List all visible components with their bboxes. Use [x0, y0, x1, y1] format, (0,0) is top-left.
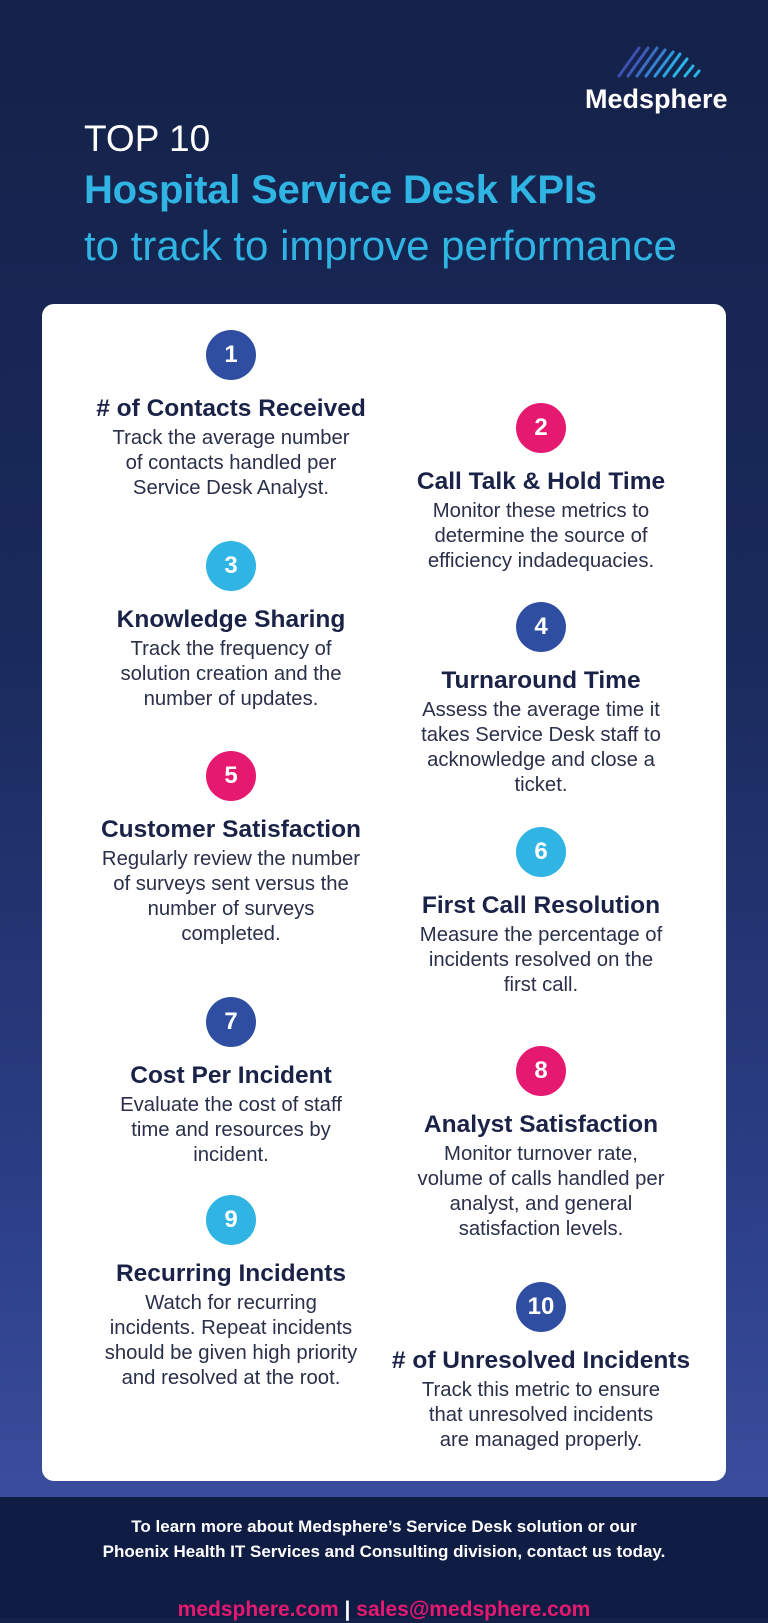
kpi 8 [418, 1046, 664, 1240]
kpi 10: that unresolved incidents [429, 1404, 653, 1426]
kpi 10: 10 [528, 1293, 554, 1320]
kpi 7: time and resources by [131, 1119, 331, 1141]
kpi 8: 8 [534, 1057, 548, 1084]
kpi 2: Call Talk & Hold Time [417, 468, 665, 495]
kpi 6: Measure the percentage of [420, 924, 662, 946]
kpi 7: Cost Per Incident [130, 1062, 332, 1089]
kpi 3: solution creation and the [120, 663, 342, 685]
kpi 9: Recurring Incidents [116, 1260, 346, 1287]
kpi 9 [105, 1195, 358, 1389]
kpi 9: should be given high priority [105, 1342, 357, 1364]
kpi 5: 5 [224, 762, 238, 789]
title: TOP 10 [84, 118, 210, 159]
kpi 4: Turnaround Time [441, 667, 641, 694]
kpi 4 [421, 602, 661, 796]
kpi 1: # of Contacts Received [96, 395, 366, 422]
kpi 9: incidents. Repeat incidents [110, 1317, 352, 1339]
kpi 4: takes Service Desk staff to [421, 724, 661, 746]
kpi 3: Knowledge Sharing [117, 606, 345, 633]
footer: medsphere.com | sales@medsphere.com [178, 1598, 590, 1621]
kpi 10: are managed properly. [440, 1429, 642, 1451]
kpi 4: acknowledge and close a [427, 749, 655, 771]
kpi 6 [420, 827, 662, 996]
kpi 3 [117, 541, 345, 710]
logo: Medsphere [585, 84, 728, 114]
kpi 3: Track the frequency of [130, 638, 332, 660]
kpi 4: 4 [534, 613, 548, 640]
kpi 10: Track this metric to ensure [422, 1379, 660, 1401]
title [84, 118, 677, 269]
kpi 4: Assess the average time it [422, 699, 660, 721]
title: to track to improve performance [84, 222, 677, 269]
kpi 10: # of Unresolved Incidents [392, 1347, 690, 1374]
kpi 8: volume of calls handled per [418, 1168, 664, 1190]
kpi 9: and resolved at the root. [122, 1367, 340, 1389]
kpi 7: 7 [224, 1008, 238, 1035]
kpi 5: Regularly review the number [102, 848, 360, 870]
kpi 5: number of surveys [148, 898, 314, 920]
kpi 2: efficiency indadequacies. [428, 550, 654, 572]
kpi 8: analyst, and general [450, 1193, 632, 1215]
kpi 4: ticket. [514, 774, 567, 796]
kpi 9: 9 [224, 1206, 238, 1233]
title: Hospital Service Desk KPIs [84, 168, 597, 212]
footer: To learn more about Medsphere’s Service Desk solution or our [131, 1517, 637, 1536]
kpi 1: 1 [224, 341, 238, 368]
kpi 3: number of updates. [144, 688, 318, 710]
kpi 5 [101, 751, 361, 945]
kpi 6: first call. [504, 974, 578, 996]
footer: Phoenix Health IT Services and Consulting division, contact us today. [103, 1542, 665, 1561]
footer [0, 1497, 768, 1618]
kpi 6: 6 [534, 838, 548, 865]
kpi 8: Analyst Satisfaction [424, 1111, 658, 1138]
kpi 1: Service Desk Analyst. [133, 477, 329, 499]
kpi 1: Track the average number [112, 427, 350, 449]
kpi 1: of contacts handled per [126, 452, 336, 474]
kpi 10 [392, 1282, 690, 1451]
kpi 8: Monitor turnover rate, [444, 1143, 638, 1165]
logo [585, 46, 728, 114]
kpi 3: 3 [224, 552, 238, 579]
kpi 5: Customer Satisfaction [101, 816, 361, 843]
kpi 8: satisfaction levels. [459, 1218, 623, 1240]
kpi 2: determine the source of [434, 525, 648, 547]
kpi 5: of surveys sent versus the [113, 873, 349, 895]
kpi 7 [120, 997, 342, 1166]
kpi 6: incidents resolved on the [429, 949, 653, 971]
kpi 6: First Call Resolution [422, 892, 660, 919]
kpi 5: completed. [181, 923, 281, 945]
kpi 1 [96, 330, 366, 499]
panel: KPI card [42, 304, 726, 1481]
kpi 2: 2 [534, 414, 548, 441]
kpi 2: Monitor these metrics to [433, 500, 649, 522]
kpi 9: Watch for recurring [145, 1292, 317, 1314]
kpi 7: incident. [193, 1144, 269, 1166]
kpi 2 [417, 403, 665, 572]
kpi 7: Evaluate the cost of staff [120, 1094, 342, 1116]
